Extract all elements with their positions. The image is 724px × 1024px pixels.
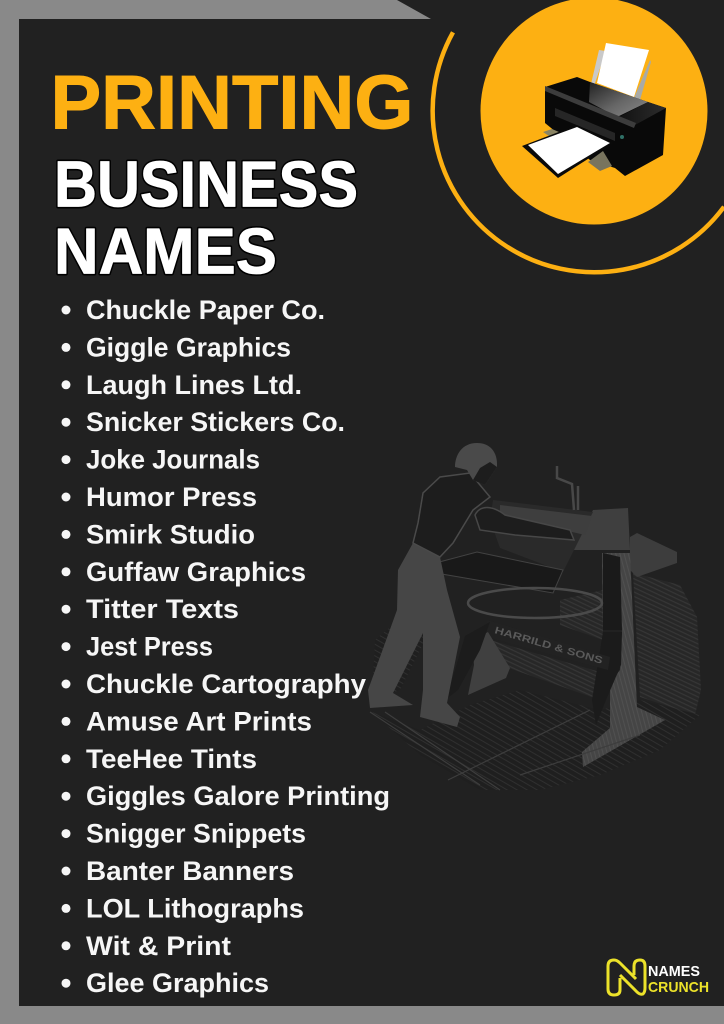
list: printing business names: Chuckle Cartography (86, 669, 366, 699)
list: printing business names: Titter Texts (86, 594, 239, 624)
list: printing business names: Humor Press (86, 482, 257, 512)
title: Names: NAMES (54, 214, 277, 288)
title: Names: NAMES (54, 214, 277, 288)
illustration: printing press with worker (368, 443, 701, 790)
press name plate: HARRILD & SONS (493, 625, 604, 667)
list: printing business names: Jest Press (86, 632, 213, 662)
list: printing business names: Chuckle Paper Co. (86, 295, 325, 325)
list: printing business names: Laugh Lines Ltd. (86, 370, 302, 400)
list: printing business names: LOL Lithographs (86, 893, 304, 923)
list: printing business names: Giggle Graphics (86, 332, 291, 362)
logo: Names Crunch: CRUNCH (648, 979, 709, 996)
icon: orange circle (480, 0, 708, 224)
decorative ring arc (433, 32, 724, 272)
list: printing business names: TeeHee Tints (86, 744, 257, 774)
title: Printing: PRINTING (50, 60, 414, 146)
logo: Names Crunch (608, 960, 709, 996)
list: printing business names: Smirk Studio (86, 519, 255, 549)
list: printing business names: Guffaw Graphics (86, 557, 306, 587)
list: printing business names: Joke Journals (86, 445, 260, 475)
list: printing business names: Banter Banners (86, 856, 294, 886)
list: printing business names (62, 295, 390, 998)
list: printing business names: Glee Graphics (86, 968, 269, 998)
list: printing business names: Amuse Art Prints (86, 706, 312, 736)
list: printing business names: Wit & Print (86, 931, 231, 961)
logo: Names Crunch: NAMES (648, 963, 700, 980)
title: Business: BUSINESS (54, 148, 358, 220)
list: printing business names: Snicker Stickers Co. (86, 407, 345, 437)
list: printing business names: Snigger Snippets (86, 819, 306, 849)
icon: printer (522, 43, 666, 178)
title: Business: BUSINESS (54, 148, 358, 220)
list: printing business names: Giggles Galore Printing (86, 781, 390, 811)
